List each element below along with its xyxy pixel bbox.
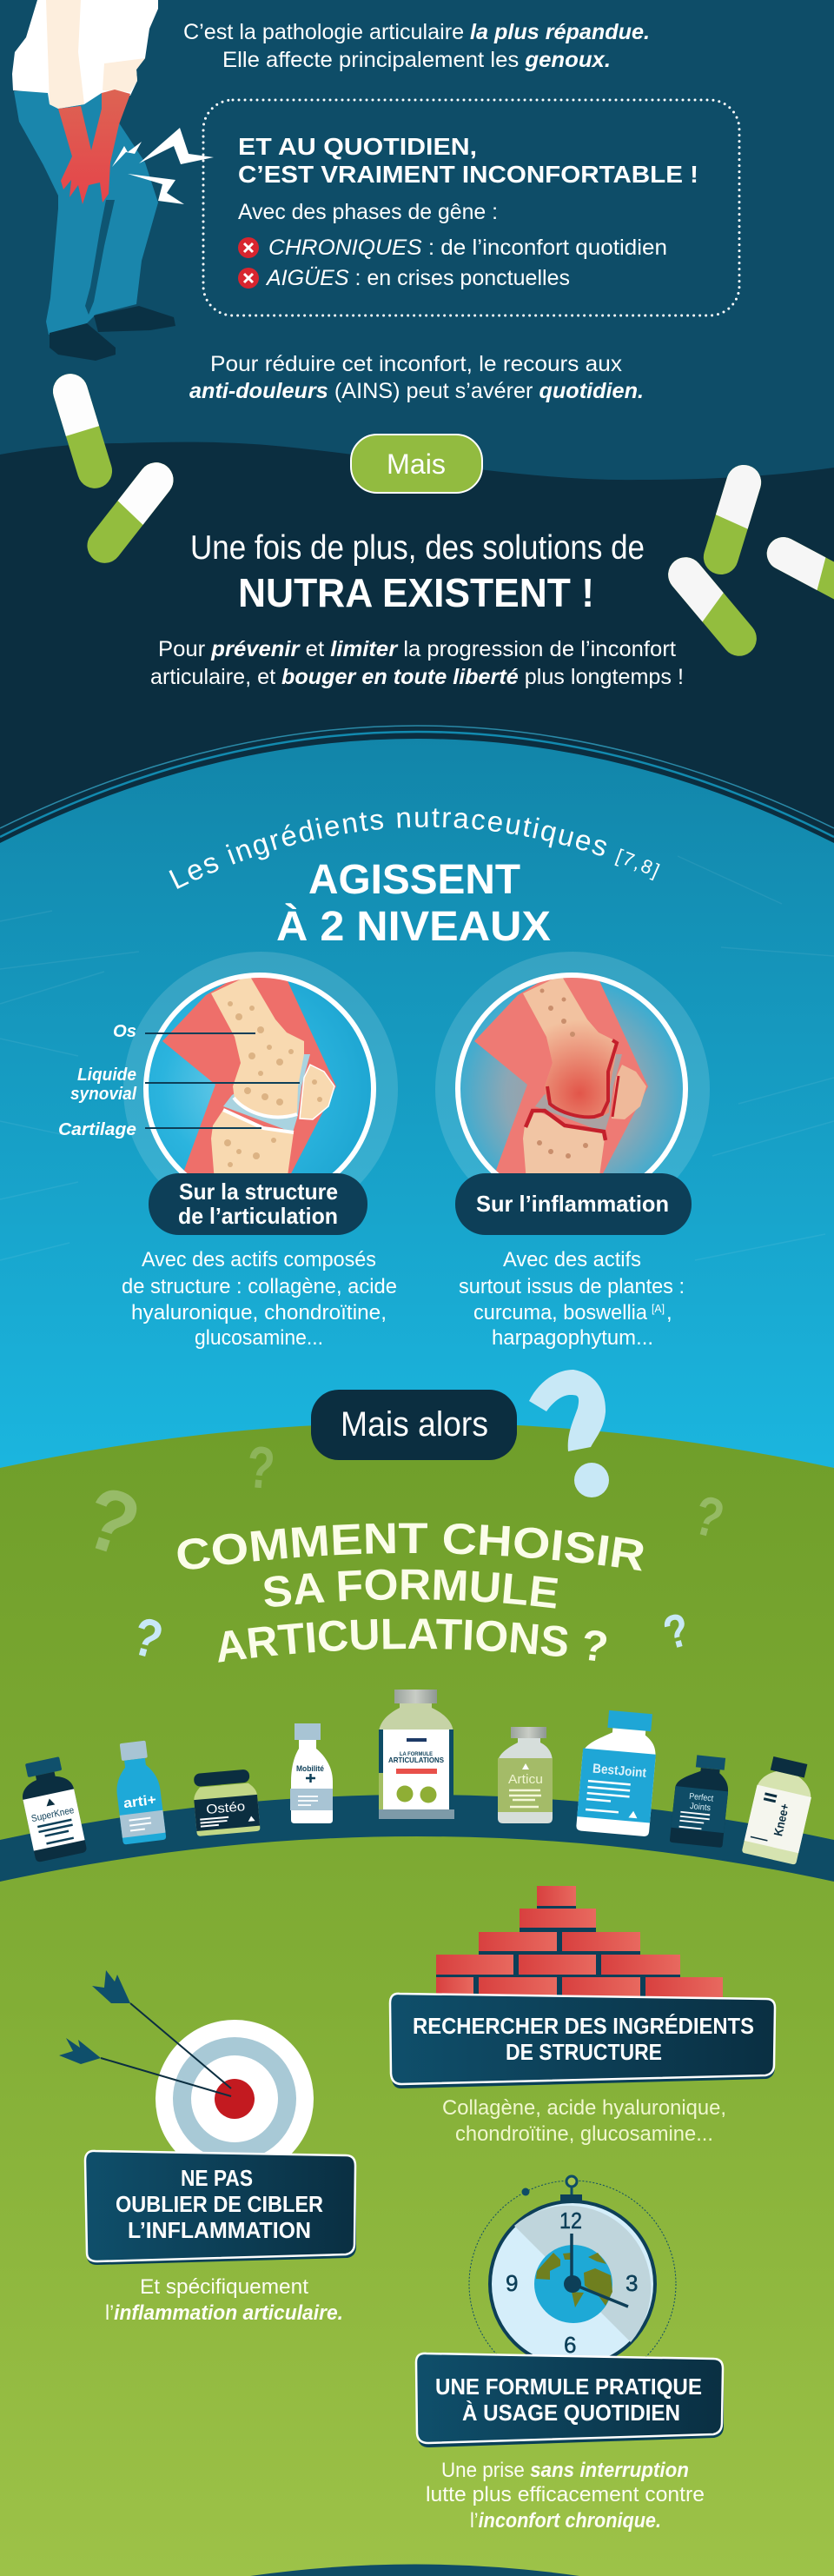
illustration: clock with earth: 3 — [626, 2270, 638, 2296]
text: painkillers: Pour réduire cet inconfort, le recours aux — [210, 352, 623, 376]
bottle: Knee+: Knee+ — [771, 1803, 791, 1837]
heading: act on two levels: À 2 NIVEAUX — [276, 903, 551, 950]
text: structure list: chondroïtine, glucosamine... — [455, 2122, 713, 2146]
bottle: BestJoint: BestJoint — [592, 1762, 647, 1781]
panel: daily use — [416, 2354, 724, 2447]
text: daily use detail: Une prise sans interruption — [441, 2459, 689, 2482]
text: structure list: Collagène, acide hyaluronique, — [442, 2096, 726, 2120]
text: painkillers — [189, 352, 644, 403]
text: inflammation detail: l’inflammation articulaire. — [105, 2301, 343, 2325]
pill: Mais — [351, 435, 482, 493]
capsule: upper left — [49, 369, 116, 493]
bottle: Ostéo: Ostéo — [206, 1799, 246, 1817]
illustration: clock with earth — [469, 2176, 676, 2387]
illustration: person with knee pain — [12, 0, 214, 361]
text: plant actives: Avec des actifs — [503, 1248, 641, 1271]
heading: how to choose — [177, 1523, 643, 1663]
pill: structure: Sur la structure — [179, 1178, 338, 1205]
jeans — [14, 87, 158, 335]
arms and hands — [58, 90, 130, 204]
intro text: C’est la pathologie articulaire la plus répandue. — [183, 20, 650, 44]
heading: how to choose: ARTICULATIONS ? — [218, 1618, 606, 1663]
icon: big question mark — [529, 1370, 609, 1497]
text: prevent and limit — [150, 637, 684, 689]
pill: structure — [149, 1173, 367, 1235]
bottle: Knee+ — [742, 1754, 818, 1865]
shirt shading — [46, 0, 145, 109]
heading: how to choose: SA FORMULE — [264, 1570, 558, 1609]
icons: small question marks: ? — [244, 1434, 277, 1502]
background: green hill — [0, 1423, 834, 2576]
intro text — [183, 20, 650, 72]
illustration: clock with earth: 6 — [564, 2332, 576, 2358]
bottle: Mobilité: Mobilité — [296, 1764, 324, 1774]
icon: cross chronic — [238, 237, 259, 258]
text: structure actives: de structure : collagène, acide — [122, 1275, 397, 1298]
illustration: healthy knee — [123, 952, 398, 1184]
bottle: La formule articulations: LA FORMULE — [400, 1751, 434, 1757]
panel: inflammation target: NE PAS — [181, 2165, 253, 2191]
callout: dotted box: CHRONIQUES : de l’inconfort quotidien — [268, 236, 667, 260]
heading: act on two levels — [169, 808, 660, 950]
bottle: BestJoint — [576, 1709, 659, 1836]
pill: structure: de l’articulation — [178, 1203, 338, 1229]
icons: small question marks — [73, 1434, 731, 1671]
heading: nutra solutions: Une fois de plus, des solutions de — [190, 529, 645, 567]
panel: daily use: UNE FORMULE PRATIQUE — [435, 2374, 702, 2400]
heading: act on two levels: AGISSENT — [308, 857, 520, 903]
background: dark wave — [0, 442, 834, 1043]
text: structure actives: hyaluronique, chondroïtine, — [131, 1301, 387, 1325]
shelf arc — [0, 1795, 834, 1882]
icon: cross acute — [238, 268, 259, 289]
text: painkillers: anti-douleurs (AINS) peut s’avérer quotidien. — [189, 379, 644, 403]
pill: inflammation — [455, 1173, 692, 1235]
pain bolts — [112, 142, 142, 167]
bottle: Articu — [498, 1727, 553, 1823]
leg shadow — [85, 200, 115, 315]
bottle: Articu: Articu — [508, 1772, 543, 1787]
bottle: Mobilité — [290, 1723, 333, 1823]
bottle: Perfect Joints — [670, 1753, 731, 1848]
bottle: arti+ — [111, 1739, 167, 1845]
shoes — [94, 306, 175, 332]
bottle: La formule articulations: ARTICULATIONS — [388, 1756, 444, 1764]
bottom dark hill — [250, 2564, 579, 2576]
bottle: Ostéo — [192, 1769, 261, 1836]
text: plant actives: surtout issus de plantes : — [459, 1275, 685, 1298]
panel: daily use: À USAGE QUOTIDIEN — [462, 2400, 680, 2426]
background: teal top — [0, 0, 834, 1043]
icons: small question marks: ? — [126, 1606, 169, 1671]
pill: inflammation: Sur l’inflammation — [476, 1191, 669, 1217]
callout: dotted box — [203, 100, 739, 315]
illustration: inflamed knee — [435, 952, 710, 1178]
callout: dotted box: AIGÜES : en crises ponctuelles — [265, 266, 570, 290]
bottle: SuperKnee: SuperKnee — [30, 1805, 75, 1824]
bottle: Perfect Joints: Joints — [690, 1802, 712, 1813]
capsule: right edge — [761, 531, 834, 614]
text: structure actives: glucosamine... — [195, 1326, 323, 1350]
heading: nutra solutions: NUTRA EXISTENT ! — [238, 570, 594, 615]
labels: knee anatomy: synovial — [70, 1085, 136, 1104]
text: prevent and limit: Pour prévenir et limiter la progression de l’inconfort — [158, 637, 676, 661]
panel: inflammation target: L’INFLAMMATION — [128, 2217, 311, 2243]
capsule: right top — [699, 461, 765, 579]
illustration: clock with earth: 9 — [506, 2270, 518, 2296]
capsule: centre left — [80, 455, 181, 570]
text: plant actives — [459, 1248, 685, 1350]
icons: small question marks: ? — [658, 1603, 695, 1660]
panel: structure ingredients: DE STRUCTURE — [506, 2039, 662, 2065]
background: blue arch section — [0, 726, 834, 1521]
text: plant actives: , — [666, 1301, 672, 1325]
panel: structure ingredients: RECHERCHER DES INGRÉDIENTS — [413, 2013, 754, 2039]
pill: Mais alors — [311, 1390, 517, 1460]
heading: nutra solutions — [190, 529, 645, 615]
pill: Mais: Mais — [387, 448, 446, 480]
shirt — [12, 0, 158, 109]
text: daily use detail: lutte plus efficacement contre — [426, 2483, 705, 2506]
pill: Mais alors: Mais alors — [341, 1405, 488, 1444]
text: daily use detail: l’inconfort chronique. — [470, 2509, 661, 2533]
panel: structure ingredients — [390, 1994, 775, 2088]
text: plant actives: [A] — [652, 1302, 665, 1315]
bottle: Perfect Joints: Perfect — [689, 1792, 714, 1804]
illustration: clock with earth: 12 — [559, 2208, 582, 2234]
text: daily use detail — [426, 2459, 705, 2533]
capsule: right middle — [661, 550, 764, 663]
text: inflammation detail — [105, 2275, 343, 2325]
illustration: brick wall — [436, 1886, 723, 1997]
bottle: arti+: arti+ — [122, 1793, 157, 1811]
text: inflammation detail: Et spécifiquement — [140, 2275, 308, 2299]
callout: dotted box: ET AU QUOTIDIEN, — [238, 133, 477, 160]
illustration: target with arrows — [59, 1970, 314, 2178]
panel: inflammation target: OUBLIER DE CIBLER — [116, 2191, 323, 2217]
text: structure actives — [122, 1248, 397, 1350]
icons: small question marks: ? — [687, 1483, 731, 1550]
heading: act on two levels: Les ingrédients nutraceutiques [7,8] — [169, 808, 660, 889]
labels: knee anatomy — [58, 1022, 300, 1139]
bottle: La formule articulations — [379, 1690, 454, 1819]
icons: small question marks: ? — [73, 1466, 151, 1577]
text: structure actives: Avec des actifs composés — [142, 1248, 376, 1271]
text: plant actives: curcuma, boswellia — [473, 1301, 648, 1325]
labels: knee anatomy: Os — [113, 1022, 136, 1041]
callout: dotted box: C’EST VRAIMENT INCONFORTABLE ! — [238, 161, 698, 188]
text: plant actives: harpagophytum... — [492, 1326, 653, 1350]
text: prevent and limit: articulaire, et bouger en toute liberté plus longtemps ! — [150, 665, 684, 689]
text: structure list — [442, 2096, 726, 2146]
labels: knee anatomy: Liquide — [77, 1066, 136, 1085]
heading: how to choose: COMMENT CHOISIR — [177, 1523, 643, 1571]
panel: inflammation target — [85, 2151, 356, 2265]
labels: knee anatomy: Cartilage — [58, 1120, 136, 1139]
bottle: SuperKnee — [16, 1755, 87, 1862]
intro text: Elle affecte principalement les genoux. — [222, 48, 611, 72]
callout: dotted box: Avec des phases de gêne : — [238, 200, 498, 224]
